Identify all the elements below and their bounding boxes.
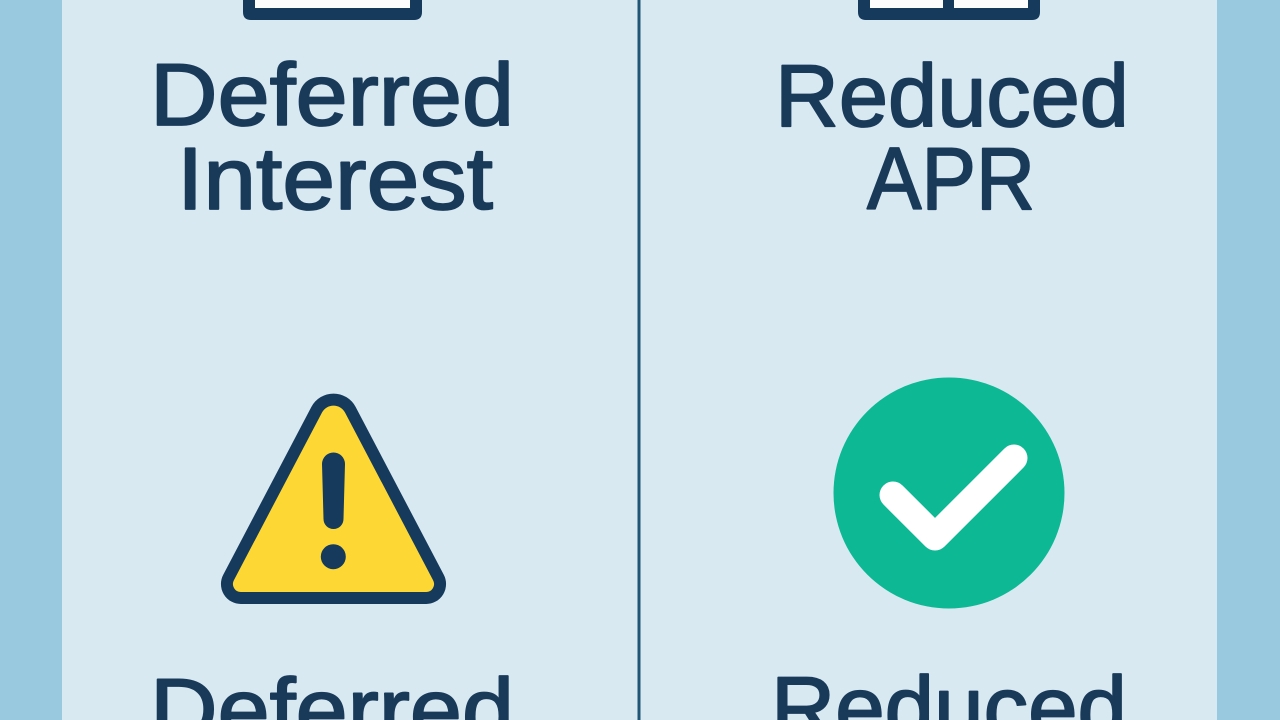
heading: Deferred Interest: Interest xyxy=(177,129,493,228)
icon: warning triangle xyxy=(227,400,440,598)
icon: cropped split box, right xyxy=(858,0,1040,20)
heading: Reduced APR: Reduced xyxy=(775,46,1129,145)
heading: Deferred Interest: Deferred xyxy=(150,45,514,144)
heading: Deferred Interest xyxy=(150,45,514,228)
white box interior, right xyxy=(870,0,1028,8)
right column: reduced APR xyxy=(771,0,1129,720)
icon: green check circle xyxy=(834,378,1064,608)
white box interior, left xyxy=(255,0,410,8)
column divider xyxy=(638,0,640,720)
heading: Reduced APR: APR xyxy=(867,129,1035,228)
left column: deferred interest xyxy=(150,0,514,720)
icon: cropped box, left xyxy=(243,0,422,20)
heading: Reduced APR xyxy=(775,46,1129,228)
